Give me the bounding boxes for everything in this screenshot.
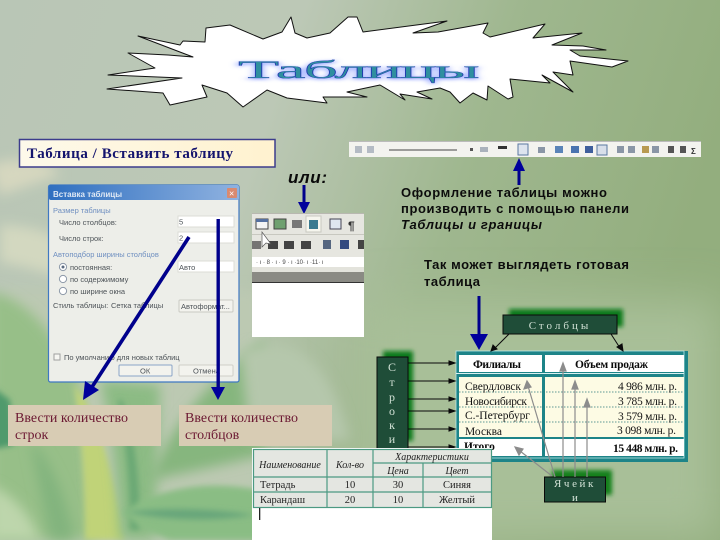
text: formatting note: производить с помощью панели xyxy=(401,201,629,216)
label: Ячейки: и xyxy=(572,492,578,504)
callout: rows: строк xyxy=(15,428,49,443)
dialog fields: По умолчанию для новых таблиц xyxy=(64,353,180,362)
arrows: Столбцы to table xyxy=(491,334,623,351)
ready table: branches and sales: Новосибирск xyxy=(465,396,527,408)
dialog fields: Автоподбор ширины столбцов xyxy=(53,250,159,259)
heading box: Таблица / Вставить таблицу xyxy=(20,140,275,167)
dialog title bar: Вставка таблицы xyxy=(53,190,122,199)
sample table sheet: Цена xyxy=(386,466,409,477)
ready table: branches and sales: Объем продаж xyxy=(575,359,649,371)
ready table: branches and sales: Итого xyxy=(464,441,495,453)
text: или: или: xyxy=(288,168,327,187)
label: Строки xyxy=(377,351,413,449)
sample table sheet: Карандаш xyxy=(260,495,305,506)
sample table sheet: Желтый xyxy=(439,495,475,506)
dialog fields: Сетка таблицы xyxy=(111,301,163,310)
text: ready table note: таблица xyxy=(424,274,481,289)
tables and borders toolbar: Σ xyxy=(691,147,696,156)
dialog fields: Число столбцов: xyxy=(59,218,117,227)
text: formatting note: Оформление таблицы можно xyxy=(401,185,607,200)
word toolbar screenshot: ¶ xyxy=(348,219,355,233)
callout: columns xyxy=(179,405,332,446)
sample table sheet: 30 xyxy=(393,480,403,491)
ready table: branches and sales: Москва xyxy=(465,426,502,438)
sample table sheet: Цвет xyxy=(444,466,469,477)
ready table: branches and sales: 4 986 млн. р. xyxy=(618,381,677,393)
sample table sheet: Синяя xyxy=(443,480,471,491)
arrow: to columns field xyxy=(211,219,225,400)
callout: rows xyxy=(8,405,161,446)
arrow: to borders button xyxy=(513,158,525,185)
label: Строки: к xyxy=(389,418,395,432)
ready table: branches and sales: С.-Петербург xyxy=(465,410,530,422)
arrow: to rows field xyxy=(83,237,189,400)
dialog fields: Число строк: xyxy=(59,234,104,243)
callout: columns: столбцов xyxy=(185,428,240,443)
dialog fields: постоянная: xyxy=(70,263,112,272)
dialog fields: 2 xyxy=(179,234,183,242)
sample table sheet: Тетрадь xyxy=(260,480,296,491)
ready table: branches and sales: 3 785 млн. р. xyxy=(618,396,677,408)
label: Строки: и xyxy=(389,432,396,446)
dialog: Вставка таблицы xyxy=(48,185,239,382)
sample table sheet: 10 xyxy=(393,495,403,506)
label: Строки: С xyxy=(388,360,396,374)
sample table sheet: Характеристики xyxy=(394,452,469,463)
ready table: branches and sales xyxy=(456,351,688,462)
dialog title bar: × xyxy=(229,188,234,198)
dialog fields: 5 xyxy=(179,218,183,226)
callout: rows: Ввести количество xyxy=(15,411,128,426)
text: ready table note: Так может выглядеть готовая xyxy=(424,257,629,272)
word toolbar screenshot: · ı · 8 · ı · 9 · ı ·10· ı ·11· ı xyxy=(256,260,324,266)
dialog fields: Отмена xyxy=(193,366,221,376)
dialog fields: Автоформат... xyxy=(181,302,230,311)
label: Строки: т xyxy=(389,375,395,389)
ready table: branches and sales: Свердловск xyxy=(465,381,521,393)
ready table: branches and sales: 3 579 млн. р. xyxy=(618,411,677,423)
sample table sheet: Наименование xyxy=(258,460,321,471)
label: Строки: р xyxy=(389,390,395,404)
text: formatting note: Таблицы и границы xyxy=(401,217,542,232)
ready table: branches and sales: 3 098 млн. р. xyxy=(617,425,676,437)
arrow: to toolbar button xyxy=(298,185,310,214)
dialog fields: по содержимому xyxy=(70,275,129,284)
dialog title bar xyxy=(49,185,239,200)
label: Ячейки xyxy=(544,470,612,504)
label: Столбцы xyxy=(503,309,623,334)
dialog fields xyxy=(53,206,234,376)
label: Ячейки: Ячейк xyxy=(554,478,596,490)
dialog fields: по ширине окна xyxy=(70,287,126,296)
arrow: to ready table xyxy=(470,296,488,350)
callout: columns: Ввести количество xyxy=(185,411,298,426)
label: Столбцы: Столбцы xyxy=(529,320,591,332)
dialog fields: Размер таблицы xyxy=(53,206,111,215)
dialog fields: Стиль таблицы: xyxy=(53,301,108,310)
sample table sheet: 10 xyxy=(345,480,355,491)
title: Таблицы xyxy=(238,57,480,85)
dialog fields: Авто xyxy=(179,263,195,272)
ready table: branches and sales: Филиалы xyxy=(473,359,521,371)
word toolbar screenshot xyxy=(252,213,364,337)
heading box: Таблица / Вставить таблицу: Таблица / Вставить таблицу xyxy=(27,146,234,162)
sample table sheet: 20 xyxy=(345,495,355,506)
ready table: branches and sales: 15 448 млн. р. xyxy=(613,443,678,455)
tables and borders toolbar xyxy=(349,141,701,157)
title: Таблицы xyxy=(238,56,480,84)
sample table sheet xyxy=(252,448,492,540)
sample table sheet: Кол-во xyxy=(335,460,364,471)
arrows: Строки to table xyxy=(408,361,455,449)
label: Строки: о xyxy=(389,404,395,418)
arrows: Ячейки to cells xyxy=(515,363,590,477)
dialog fields: ОК xyxy=(140,366,151,376)
title burst shape xyxy=(107,17,628,107)
